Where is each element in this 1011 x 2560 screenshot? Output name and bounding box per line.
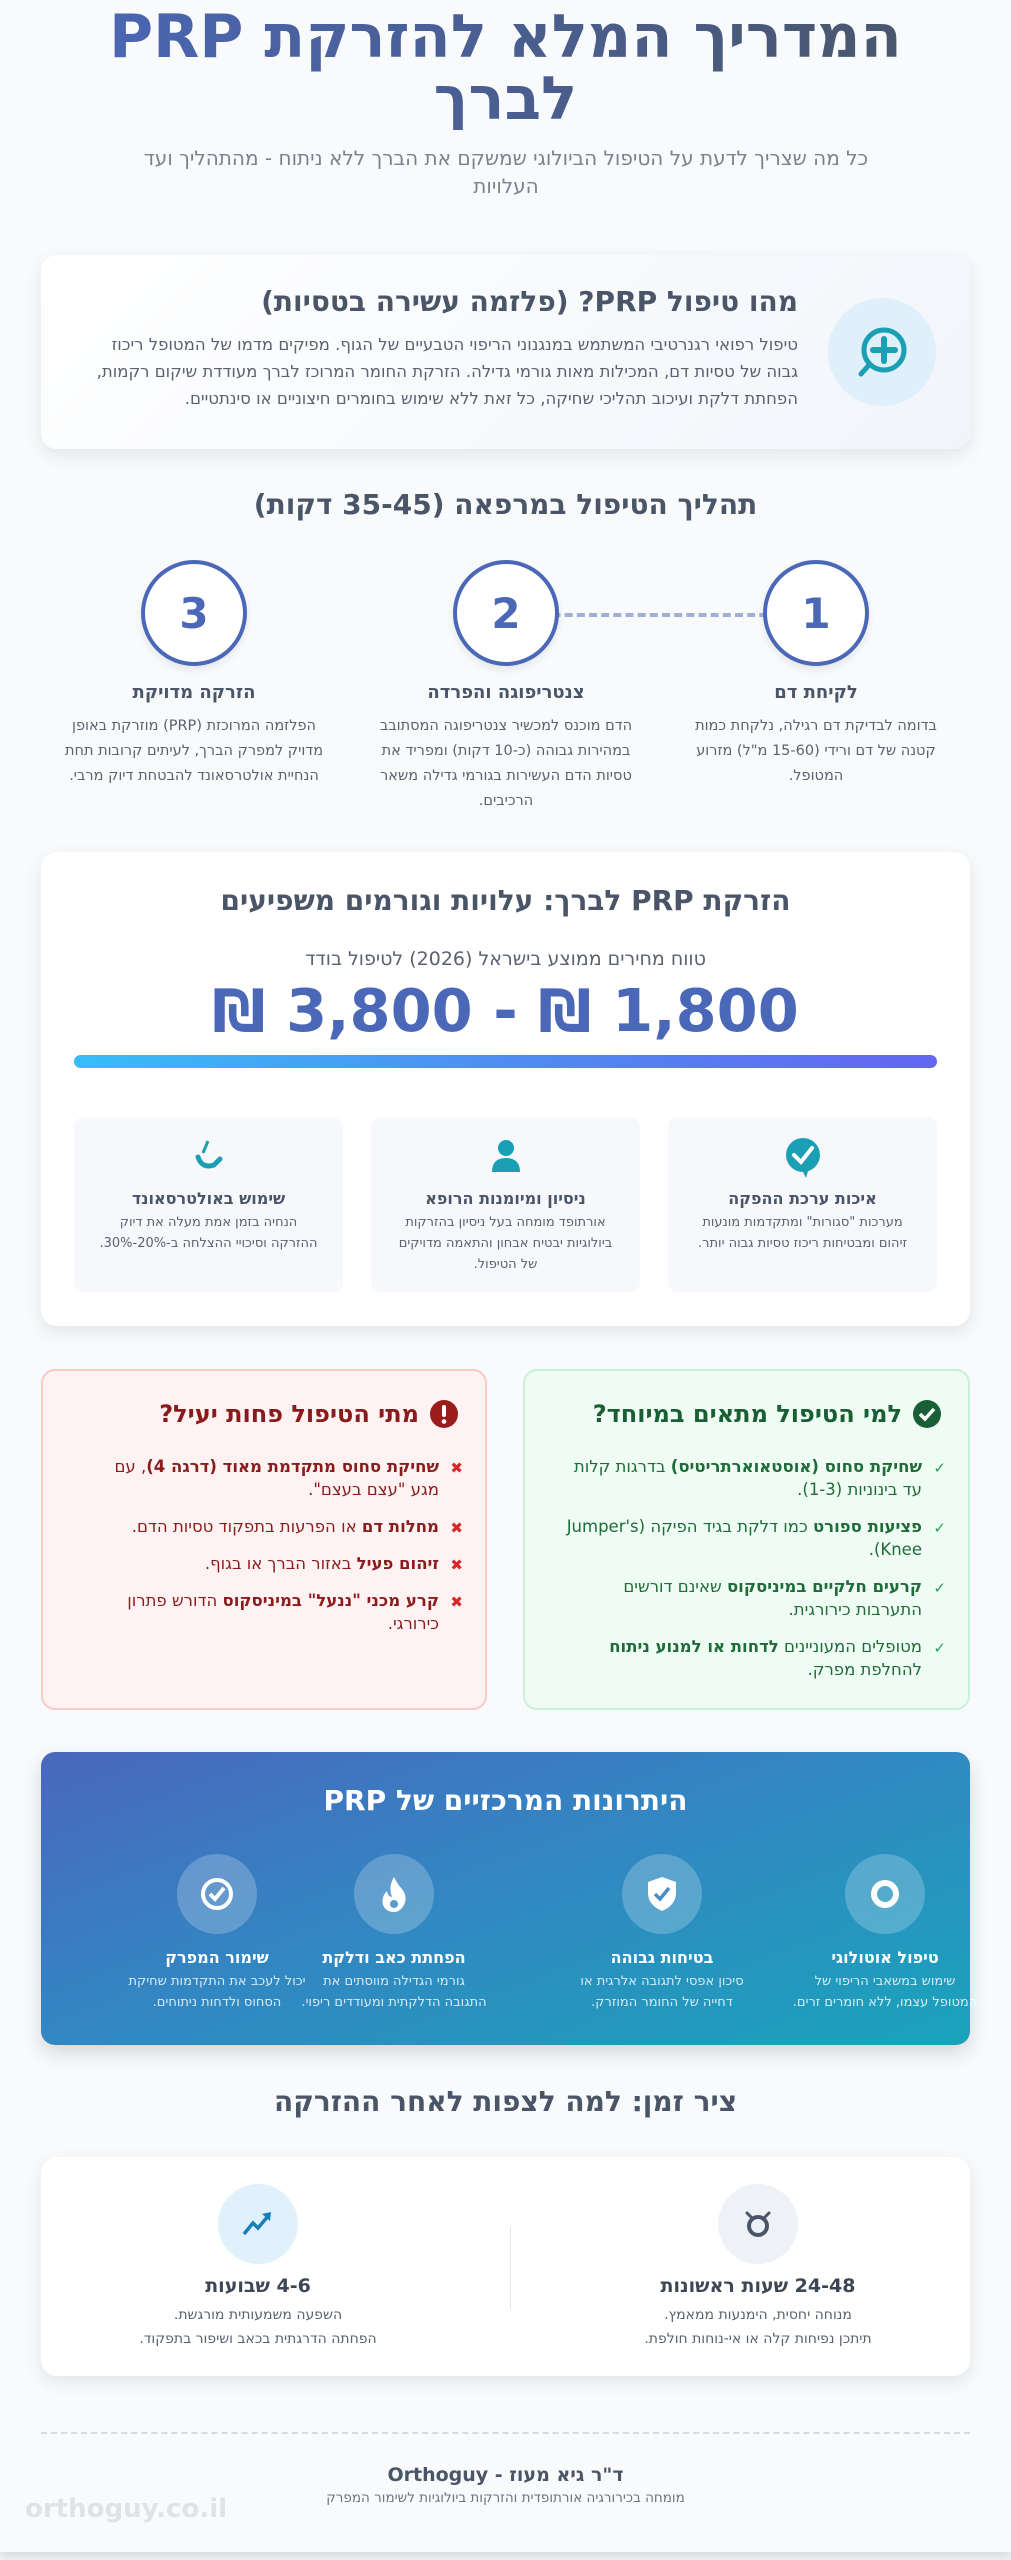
panel: timeline: תיתכן נפיחות קלה או אי-נוחות חולפת. (644, 2331, 872, 2347)
advantage: joint preservation: יכול לעכב את התקדמות שחיקת (128, 1974, 306, 1989)
author subtitle: מומחה בכירורגיה אורתופדית והזרקות ביולוגיות לשימור המפרק (326, 2490, 685, 2506)
list: שחיקת סחוס מתקדמת מאוד (דרגה 4), עם (114, 1457, 439, 1476)
process steps: 2 (491, 588, 521, 638)
process steps: 3 (179, 588, 209, 638)
price range: ₪ 3,800 - ₪ 1,800 (212, 976, 799, 1045)
icon: trend up (218, 2184, 298, 2264)
icon: shield (622, 1854, 702, 1934)
heading with check icon: למי הטיפול מתאים במיוחד? (593, 1400, 902, 1428)
list: מטופלים המעוניינים לדחות או למנוע ניתוח להחלפת מפרק. (609, 1637, 922, 1679)
heading: הזרקת PRP לברך: עלויות וגורמים משפיעים (221, 884, 790, 917)
watermark: orthoguy.co.il (25, 2494, 227, 2524)
factor: quality: זיהום ומבטיחות ריכוז טסיות גבוה יותר. (698, 1236, 907, 1251)
icon: plus magnifier (828, 298, 936, 406)
factor: ultrasound: הנחיה בזמן אמת מעלה את דיוק (120, 1215, 297, 1230)
price label: טווח מחירים ממוצע בישראל (2026) לטיפול בודד (305, 948, 706, 970)
author name: ד"ר גיא מעוז - Orthoguy (387, 2464, 624, 2486)
icon: flame (354, 1854, 434, 1934)
advantage: autologous: שימוש במשאבי הריפוי של (815, 1974, 955, 1989)
process steps: הפלזמה המרוכזת (PRP) מוזרקת באופן מדויק למפרק הברך, לעיתים קרובות תחת הנחיית אולטרסאונד להבטחת דיוק מרבי. (65, 718, 323, 784)
timeline: first 48 hours (644, 2184, 872, 2347)
factor: ultrasound: שימוש באולטרסאונד (132, 1189, 285, 1208)
icon: ring (845, 1854, 925, 1934)
advantage: safety: סיכון אפסי לתגובה אלרגית או (580, 1974, 744, 1989)
factor: ultrasound: ההזרקה וסיכויי ההצלחה ב-20%-30%. (100, 1236, 318, 1251)
heading: timeline: ציר זמן: למה לצפות לאחר ההזרקה (274, 2085, 737, 2118)
factor: doctor (371, 1117, 640, 1292)
list: ✓ (933, 1639, 946, 1657)
heading: process: תהליך הטיפול במרפאה (35-45 דקות) (254, 488, 757, 521)
icon: check circle (177, 1854, 257, 1934)
advantage: joint preservation: שימור המפרק (165, 1948, 269, 1967)
list: קרעים חלקיים במיניסקוס שאינם דורשים התערבות כירורגית. (623, 1577, 922, 1619)
icon: person (492, 1140, 520, 1172)
list: ✖ (450, 1593, 463, 1611)
arrow: dashed connector (516, 613, 816, 617)
list (566, 1457, 946, 1679)
advantage: safety (580, 1854, 744, 2010)
factor: quality: מערכות "סגורות" ומתקדמות מונעות (702, 1215, 903, 1230)
factor: doctor: ביולוגיות יבטיח אבחון והתאמה מדויקים (399, 1236, 612, 1251)
advantage: joint preservation (128, 1854, 306, 2010)
step 2 (380, 560, 632, 809)
icon: clock (718, 2184, 798, 2264)
panel: advantages (41, 1752, 970, 2045)
panel: what is PRP (41, 255, 970, 449)
heading: היתרונות המרכזיים של PRP (324, 1784, 687, 1817)
factor: ultrasound (74, 1117, 343, 1292)
panel: costs (41, 852, 970, 1326)
advantage: safety: בטיחות גבוהה (611, 1948, 713, 1967)
advantage: joint preservation: הסחוס ולדחות ניתוחים. (153, 1995, 281, 2010)
title: לברך (434, 64, 577, 134)
process steps: הדם מוכנס למכשיר צנטריפוגה המסתובב במהירות גבוהה (כ-10 דקות) ומפריד את טסיות הדם העשירות בגורמי גדילה משאר הרכיבים. (380, 718, 632, 809)
advantage: pain reduction (301, 1854, 487, 2010)
heading: מהו טיפול PRP? (פלזמה עשירה בטסיות) (261, 285, 798, 318)
step 3 (65, 560, 323, 784)
advantage: pain reduction: התגובה הדלקתית ומעודדים ריפוי. (301, 1995, 487, 2010)
text block: טיפול רפואי רגנרטיבי המשתמש במנגנוני הריפוי הטבעיים של הגוף. מפיקים מדמו של המטופל ריכוז גבוה של טסיות דם, המכילות מאות גורמי גדילה. הזרקת החומר המרוכז לברך מעודדת שיקום רקמות, הפחתת דלקת ועיכוב תהליכי שחיקה, כל זאת ללא שימוש בחומרים חיצוניים או סינתטיים. (97, 335, 798, 408)
list (114, 1457, 463, 1633)
process steps (65, 560, 937, 809)
timeline: 4-6 weeks (139, 2184, 377, 2347)
list: ✓ (933, 1519, 946, 1537)
panel: suitable for (523, 1369, 970, 1710)
panel: timeline: השפעה משמעותית מורגשת. (174, 2307, 342, 2323)
list: ✓ (933, 1579, 946, 1597)
panel: timeline: 4-6 שבועות (205, 2275, 311, 2297)
title (109, 2, 902, 134)
panel: timeline: 24-48 שעות ראשונות (661, 2275, 855, 2297)
list: קרע מכני "ננעל" במיניסקוס הדורש פתרון כירורגי. (127, 1591, 439, 1633)
subtitle: כל מה שצריך לדעת על הטיפול הביולוגי שמשקם את הברך ללא ניתוח - מהתהליך ועד העלויות (144, 146, 868, 198)
factor: quality: איכות ערכת ההפקה (728, 1189, 877, 1208)
advantage: safety: דחייה של החומר המוזרק. (591, 1995, 733, 2010)
advantage: autologous: טיפול אוטולוגי (831, 1948, 939, 1967)
list: פציעות ספורט כמו דלקת בגיד הפיקה (Jumper's Knee). (567, 1517, 922, 1559)
title: המדריך המלא להזרקת PRP (109, 2, 902, 72)
divider (510, 2227, 511, 2309)
gradient bar (74, 1055, 937, 1068)
icon: ultrasound probe (196, 1140, 222, 1168)
process steps: הזרקה מדויקת (133, 682, 255, 703)
factor: quality (668, 1117, 937, 1292)
list: מגע "עצם בעצם". (308, 1480, 439, 1499)
panel: less effective (41, 1369, 487, 1710)
panel: timeline (41, 2157, 970, 2376)
list: ✖ (450, 1459, 463, 1477)
list: זיהום פעיל באזור הברך או בגוף. (205, 1554, 439, 1573)
advantage: pain reduction: גורמי הגדילה מווסתים את (323, 1974, 465, 1989)
factor: doctor: אורתופד מומחה בעל ניסיון בהזרקות (405, 1215, 606, 1230)
list: ✖ (450, 1556, 463, 1574)
process steps: בדומה לבדיקת דם רגילה, נלקחת כמות קטנה של דם ורידי (15-60 מ"ל) מזרוע המטופל. (695, 718, 937, 784)
process steps: לקיחת דם (774, 682, 858, 703)
factor: doctor: של הטיפול. (474, 1257, 537, 1272)
advantage: pain reduction: הפחתת כאב ודלקת (322, 1948, 466, 1967)
list: ✖ (450, 1519, 463, 1537)
step 1 (695, 560, 937, 784)
advantage: autologous: המטופל עצמו, ללא חומרים זרים. (793, 1995, 977, 2010)
heading with alert icon: מתי הטיפול פחות יעיל? (159, 1400, 419, 1428)
advantage: autologous (793, 1854, 977, 2010)
icon: check badge (786, 1138, 820, 1178)
list: ✓ (933, 1459, 946, 1477)
list: שחיקת סחוס (אוסטאוארתריטיס) בדרגות קלות עד בינוניות (1-3). (574, 1457, 922, 1499)
process steps: 1 (801, 588, 831, 638)
factor: doctor: ניסיון ומיומנות הרופא (425, 1189, 586, 1208)
panel: timeline: מנוחה יחסית, הימנעות ממאמץ. (664, 2307, 852, 2323)
process steps: צנטריפוגה והפרדה (427, 682, 585, 703)
footer (41, 2432, 970, 2542)
panel: timeline: הפחתה הדרגתית בכאב ושיפור בתפקוד. (139, 2331, 377, 2347)
list: מחלות דם או הפרעות בתפקוד טסיות הדם. (132, 1517, 439, 1536)
